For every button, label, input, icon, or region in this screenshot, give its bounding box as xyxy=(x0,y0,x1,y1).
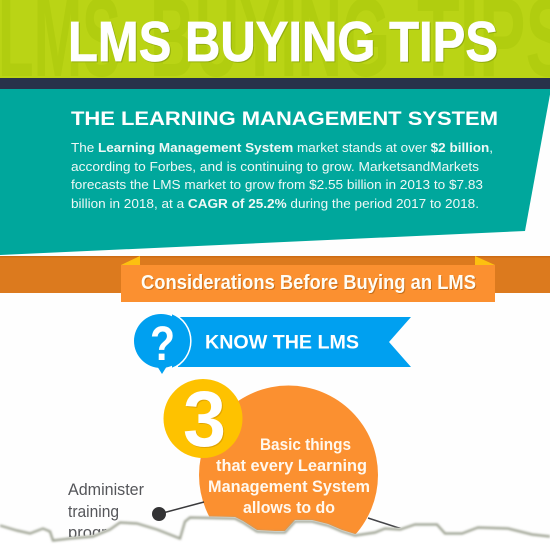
panel body text: billion in 2018, at a CAGR of 25.2% during the period 2017 to 2018. xyxy=(71,196,479,211)
number badge xyxy=(164,374,242,464)
icon: question bubble: ? xyxy=(150,318,175,371)
label: administer training programs xyxy=(68,480,144,542)
section ribbon: considerations xyxy=(121,256,495,302)
label: administer training programs: programs xyxy=(68,523,138,542)
number badge: 3 xyxy=(183,374,226,463)
label: administer training programs: training xyxy=(68,502,119,521)
icon: question bubble xyxy=(134,314,191,374)
connector: right line xyxy=(368,518,402,529)
callout text: allows to do xyxy=(243,499,335,517)
connector: left dot xyxy=(152,502,204,521)
title banner xyxy=(0,0,550,100)
callout text: Basic things xyxy=(260,436,351,454)
label: administer training programs: Administer xyxy=(68,480,144,499)
panel body text: according to Forbes, and is continuing to grow. MarketsandMarkets xyxy=(71,159,480,174)
ribbon text shadow: Considerations Before Buying an LMS xyxy=(142,273,477,295)
banner text: KNOW THE LMS xyxy=(205,332,359,354)
banner: know the LMS xyxy=(134,314,411,374)
torn paper edge xyxy=(0,516,550,550)
panel body text xyxy=(71,140,493,211)
callout text: Management System xyxy=(208,478,370,496)
panel body text: forecasts the LMS market to grow from $2.55 billion in 2013 to $7.83 xyxy=(71,177,483,192)
callout text xyxy=(208,436,370,517)
panel heading: THE LEARNING MANAGEMENT SYSTEM xyxy=(71,108,498,130)
callout: basic things xyxy=(164,374,378,550)
orange band xyxy=(0,256,550,293)
panel: learning management system xyxy=(0,89,550,255)
dark divider bar xyxy=(0,78,550,89)
number badge: 3 xyxy=(184,375,227,464)
ribbon text: Considerations Before Buying an LMS xyxy=(141,272,476,294)
panel body text: The Learning Management System market stands at over $2 billion, xyxy=(71,140,493,155)
callout text: that every Learning xyxy=(216,457,367,475)
